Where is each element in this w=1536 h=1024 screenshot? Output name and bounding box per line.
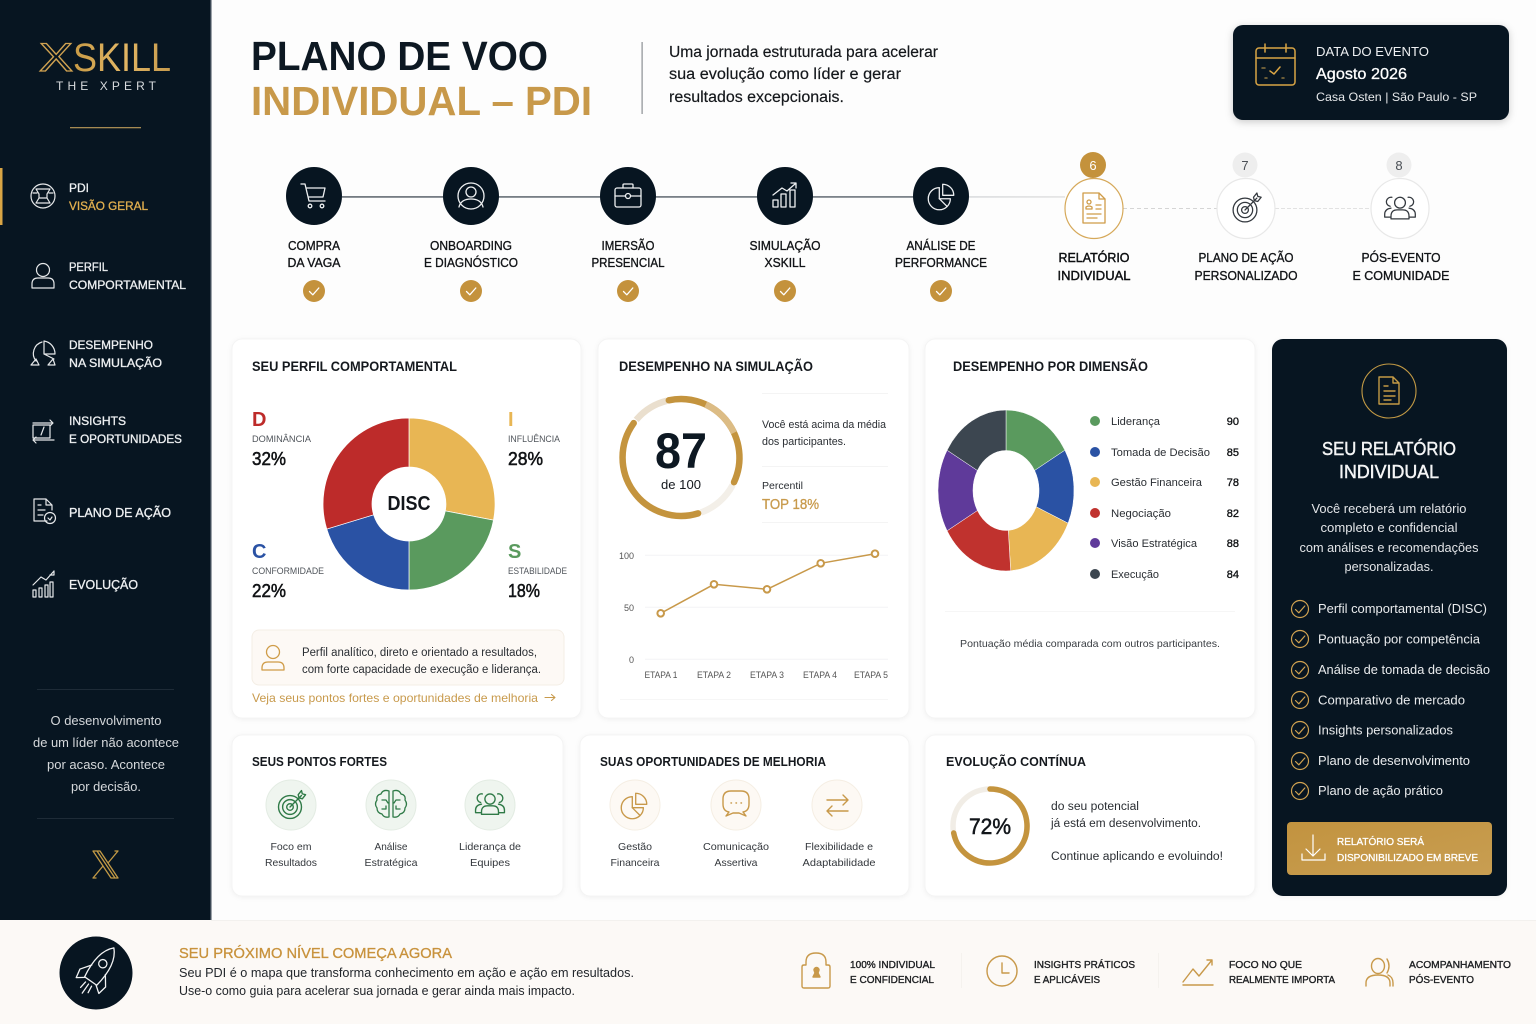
legend: Visão Estratégica bbox=[1111, 538, 1198, 550]
checklist: Pontuação por competência bbox=[1318, 632, 1480, 646]
line chart: ETAPA 2 bbox=[697, 670, 731, 680]
nav item: perfil comportamental bbox=[32, 260, 186, 292]
panel: seus pontos fortes bbox=[232, 735, 563, 896]
call to action text bbox=[179, 945, 634, 998]
heading: SEUS PONTOS FORTES bbox=[252, 754, 387, 769]
strength: análise estratégica bbox=[364, 780, 418, 869]
strength: foco em resultados: Resultados bbox=[265, 857, 317, 869]
subtitle: Uma jornada estruturada para acelerar bbox=[669, 44, 938, 61]
step 3: imersão presencial: PRESENCIAL bbox=[592, 256, 665, 270]
legend: D: DOMINÂNCIA bbox=[252, 434, 312, 445]
icon: calendar bbox=[1256, 44, 1295, 85]
logo: XSKILL: THE XPERT bbox=[56, 79, 157, 93]
benefit: acompanhamento pós-evento bbox=[1366, 958, 1511, 986]
logo: XSKILL: X bbox=[39, 36, 73, 80]
benefit: acompanhamento pós-evento: PÓS-EVENTO bbox=[1409, 973, 1474, 986]
legend: Negociação bbox=[1111, 508, 1171, 520]
line chart bbox=[619, 550, 888, 680]
legend: I bbox=[508, 409, 561, 469]
call to action text: Seu PDI é o mapa que transforma conhecimento em ação e ação em resultados. bbox=[179, 966, 634, 980]
heading: SEU RELATÓRIO bbox=[1322, 438, 1456, 459]
nav item: evolução bbox=[33, 571, 138, 597]
benefit: insights práticos: E APLICÁVEIS bbox=[1034, 973, 1100, 986]
step 1: compra da vaga: COMPRA bbox=[288, 239, 341, 253]
legend: 78 bbox=[1227, 477, 1239, 489]
footer banner bbox=[0, 920, 1536, 1024]
nav item: PDI visão geral: PDI bbox=[69, 181, 89, 195]
line chart: ETAPA 4 bbox=[803, 670, 837, 680]
icon: X mark bbox=[93, 851, 118, 878]
opportunity: comunicação assertiva: Comunicação bbox=[703, 841, 769, 853]
opportunity: flexibilidade e adaptabilidade: Adaptabilidade bbox=[802, 857, 876, 869]
description: personalizadas. bbox=[1344, 560, 1434, 574]
checklist: Comparativo de mercado bbox=[1318, 694, 1465, 708]
step 1: compra da vaga bbox=[286, 167, 342, 302]
opportunity: comunicação assertiva bbox=[703, 780, 769, 869]
nav item: perfil comportamental: PERFIL bbox=[69, 260, 108, 274]
step 7: plano de ação personalizado bbox=[1194, 152, 1298, 283]
legend: I: 28% bbox=[508, 449, 543, 469]
opportunity: gestão financeira: Gestão bbox=[618, 841, 652, 853]
opportunity: gestão financeira bbox=[610, 780, 660, 869]
heading: DESEMPENHO POR DIMENSÃO bbox=[953, 359, 1148, 374]
step 2: onboarding e diagnóstico: E DIAGNÓSTICO bbox=[424, 255, 518, 270]
legend: C: 22% bbox=[252, 581, 286, 601]
callout: profile summary: Perfil analítico, direto e orientado a resultados, bbox=[302, 647, 537, 659]
step 3: imersão presencial bbox=[592, 167, 665, 302]
checklist: Plano de ação prático bbox=[1318, 784, 1443, 798]
strength: liderança de equipes: Equipes bbox=[470, 857, 510, 869]
callout: profile summary bbox=[252, 630, 564, 685]
comparison note: Você está acima da média bbox=[762, 419, 886, 431]
legend bbox=[1090, 416, 1239, 581]
heading: DESEMPENHO NA SIMULAÇÃO bbox=[619, 359, 813, 374]
opportunity: flexibilidade e adaptabilidade: Flexibilidade e bbox=[805, 841, 873, 853]
checklist bbox=[1292, 600, 1490, 800]
step 8: pós-evento e comunidade: PÓS-EVENTO bbox=[1362, 250, 1441, 265]
button: RELATÓRIO SERÁ bbox=[1337, 835, 1424, 848]
legend: Liderança bbox=[1111, 416, 1161, 428]
call to action text: Use-o como guia para acelerar sua jornada e gerar ainda mais impacto. bbox=[179, 984, 575, 998]
description: completo e confidencial bbox=[1320, 521, 1458, 535]
evolution text: do seu potencial bbox=[1051, 801, 1139, 813]
step 6: relatório individual: INDIVIDUAL bbox=[1058, 268, 1130, 283]
step 8: pós-evento e comunidade: E COMUNIDADE bbox=[1352, 269, 1450, 283]
sidebar quote: por acaso. Acontece bbox=[47, 757, 165, 772]
nav item: desempenho na simulação: DESEMPENHO bbox=[69, 338, 153, 352]
line chart: ETAPA 1 bbox=[644, 670, 678, 680]
checklist: Análise de tomada de decisão bbox=[1318, 663, 1490, 677]
strength: foco em resultados: Foco em bbox=[270, 841, 312, 853]
benefit: insights práticos: INSIGHTS PRÁTICOS bbox=[1034, 958, 1135, 971]
step 5: análise de performance bbox=[895, 167, 987, 302]
legend: 88 bbox=[1227, 538, 1239, 550]
score gauge: 87 bbox=[655, 423, 707, 479]
heading: INDIVIDUAL bbox=[1339, 462, 1439, 482]
checklist: Perfil comportamental (DISC) bbox=[1318, 602, 1487, 616]
legend: 90 bbox=[1227, 416, 1239, 428]
legend: 85 bbox=[1227, 447, 1239, 459]
sidebar quote: por decisão. bbox=[71, 779, 141, 794]
nav item: desempenho na simulação bbox=[31, 338, 162, 370]
progress ring: 72% bbox=[969, 814, 1011, 839]
legend: D: 32% bbox=[252, 449, 286, 469]
nav item: perfil comportamental: COMPORTAMENTAL bbox=[69, 278, 186, 292]
step 2: onboarding e diagnóstico: ONBOARDING bbox=[430, 239, 512, 253]
score gauge bbox=[623, 399, 739, 516]
panel: seu perfil comportamental: DISC bbox=[388, 493, 430, 515]
line chart: ETAPA 3 bbox=[750, 670, 784, 680]
logo: XSKILL: SKILL bbox=[73, 36, 171, 80]
benefit: individual e confidencial bbox=[802, 953, 935, 988]
chart: DISC donut bbox=[323, 418, 495, 590]
nav item: insights e oportunidades bbox=[33, 414, 182, 446]
legend: C: C bbox=[252, 541, 266, 563]
line chart: 0 bbox=[629, 655, 634, 665]
legend: Tomada de Decisão bbox=[1111, 447, 1210, 459]
legend: S bbox=[508, 541, 567, 601]
percentile bbox=[762, 480, 819, 513]
evolution text: já está em desenvolvimento. bbox=[1050, 818, 1201, 830]
legend: D bbox=[252, 409, 312, 469]
step 8: pós-evento e comunidade: 8 bbox=[1395, 158, 1403, 173]
legend: Execução bbox=[1111, 569, 1159, 581]
panel: evolução contínua bbox=[925, 735, 1255, 896]
evolution text bbox=[1050, 801, 1223, 863]
percentile: TOP 18% bbox=[762, 497, 819, 513]
event date box: Casa Osten | São Paulo - SP bbox=[1316, 90, 1477, 104]
step 5: análise de performance: ANÁLISE DE bbox=[906, 238, 976, 253]
step 7: plano de ação personalizado: 7 bbox=[1241, 158, 1249, 173]
step 6: relatório individual: RELATÓRIO bbox=[1058, 250, 1130, 265]
legend: C bbox=[252, 541, 324, 601]
nav item: plano de ação: PLANO DE AÇÃO bbox=[69, 506, 171, 520]
benefit: foco no que importa bbox=[1183, 960, 1335, 986]
legend: S: S bbox=[508, 541, 521, 563]
nav item: plano de ação bbox=[34, 499, 171, 524]
step 4: simulação xskill: XSKILL bbox=[764, 256, 806, 270]
nav item: desempenho na simulação: NA SIMULAÇÃO bbox=[69, 356, 162, 370]
opportunity: gestão financeira: Financeira bbox=[610, 857, 660, 869]
benefit: individual e confidencial: E CONFIDENCIAL bbox=[850, 975, 934, 986]
nav item: PDI visão geral bbox=[31, 181, 148, 213]
call to action text: SEU PRÓXIMO NÍVEL COMEÇA AGORA bbox=[179, 945, 452, 962]
sidebar bbox=[0, 0, 212, 920]
strength: análise estratégica: Estratégica bbox=[364, 857, 418, 869]
icon: report bbox=[1362, 364, 1416, 418]
footnote: Pontuação média comparada com outros participantes. bbox=[960, 639, 1220, 650]
benefit: acompanhamento pós-evento: ACOMPANHAMENTO bbox=[1409, 960, 1511, 971]
legend: I: INFLUÊNCIA bbox=[508, 434, 561, 445]
benefit: individual e confidencial: 100% INDIVIDUAL bbox=[850, 960, 935, 971]
legend: C: CONFORMIDADE bbox=[252, 566, 324, 577]
nav item: insights e oportunidades: INSIGHTS bbox=[69, 414, 126, 428]
benefit: insights práticos bbox=[987, 956, 1135, 986]
panel: seu relatório individual bbox=[1272, 339, 1507, 896]
legend: I: I bbox=[508, 409, 514, 431]
description: Você receberá um relatório bbox=[1312, 502, 1467, 516]
checklist: Plano de desenvolvimento bbox=[1318, 754, 1470, 768]
button bbox=[1287, 822, 1492, 875]
panel: desempenho na simulação bbox=[598, 339, 909, 718]
nav item: insights e oportunidades: E OPORTUNIDADES bbox=[69, 432, 182, 446]
step 4: simulação xskill bbox=[750, 167, 821, 302]
panel: seu perfil comportamental bbox=[232, 339, 581, 718]
opportunity: comunicação assertiva: Assertiva bbox=[714, 857, 758, 869]
nav item: evolução: EVOLUÇÃO bbox=[69, 578, 138, 592]
legend: S: 18% bbox=[508, 581, 540, 601]
step 6: relatório individual bbox=[1058, 152, 1130, 283]
subtitle bbox=[669, 44, 938, 106]
title: PLANO DE VOO bbox=[251, 33, 548, 79]
benefit: foco no que importa: FOCO NO QUE bbox=[1229, 960, 1302, 971]
heading: SUAS OPORTUNIDADES DE MELHORIA bbox=[600, 754, 827, 769]
description: com análises e recomendações bbox=[1300, 541, 1478, 555]
strength: liderança de equipes bbox=[459, 780, 521, 869]
step 3: imersão presencial: IMERSÃO bbox=[602, 239, 655, 253]
legend: S: ESTABILIDADE bbox=[508, 566, 567, 577]
logo: XSKILL bbox=[39, 36, 171, 93]
step 7: plano de ação personalizado: PERSONALIZADO bbox=[1194, 269, 1298, 283]
nav item: PDI visão geral: VISÃO GERAL bbox=[69, 199, 148, 213]
line chart: 50 bbox=[624, 603, 634, 613]
link with arrow: Veja seus pontos fortes e oportunidades de melhoria bbox=[252, 691, 538, 705]
step 1: compra da vaga: DA VAGA bbox=[288, 256, 341, 270]
callout: profile summary: com forte capacidade de execução e liderança. bbox=[302, 664, 541, 676]
step 8: pós-evento e comunidade bbox=[1352, 152, 1450, 283]
progress ring bbox=[953, 789, 1027, 863]
legend: Gestão Financeira bbox=[1111, 477, 1203, 489]
strength: foco em resultados bbox=[265, 780, 317, 869]
legend: D: D bbox=[252, 409, 266, 431]
step 6: relatório individual: 6 bbox=[1089, 158, 1097, 173]
event date box: Agosto 2026 bbox=[1316, 66, 1407, 83]
step 5: análise de performance: PERFORMANCE bbox=[895, 256, 987, 270]
comparison note bbox=[762, 419, 886, 448]
evolution text: Continue aplicando e evoluindo! bbox=[1051, 851, 1223, 863]
journey timeline bbox=[286, 152, 1450, 302]
subtitle: sua evolução como líder e gerar bbox=[669, 66, 901, 83]
comparison note: dos participantes. bbox=[762, 436, 846, 448]
title bbox=[251, 33, 592, 124]
step 4: simulação xskill: SIMULAÇÃO bbox=[750, 239, 821, 253]
legend: 82 bbox=[1227, 508, 1239, 520]
sidebar quote bbox=[33, 713, 179, 794]
checklist: Insights personalizados bbox=[1318, 724, 1453, 738]
panel: desempenho por dimensão bbox=[925, 339, 1255, 718]
step 2: onboarding e diagnóstico bbox=[424, 167, 518, 302]
active nav marker bbox=[0, 168, 2, 225]
heading: EVOLUÇÃO CONTÍNUA bbox=[946, 754, 1087, 769]
event date box bbox=[1233, 25, 1509, 120]
title: INDIVIDUAL – PDI bbox=[251, 78, 592, 124]
step 7: plano de ação personalizado: PLANO DE AÇÃO bbox=[1198, 251, 1294, 265]
percentile: Percentil bbox=[762, 480, 803, 492]
button: DISPONIBILIZADO EM BREVE bbox=[1337, 853, 1478, 864]
legend: 84 bbox=[1227, 569, 1239, 581]
panel: suas oportunidades de melhoria bbox=[580, 735, 909, 896]
event date box: DATA DO EVENTO bbox=[1316, 45, 1429, 59]
icon: rocket bbox=[60, 936, 132, 1010]
sidebar quote: O desenvolvimento bbox=[50, 713, 162, 728]
heading bbox=[1322, 438, 1456, 482]
strength: análise estratégica: Análise bbox=[374, 841, 408, 853]
sidebar quote: de um líder não acontece bbox=[33, 735, 179, 750]
heading: SEU PERFIL COMPORTAMENTAL bbox=[252, 359, 457, 374]
description bbox=[1300, 502, 1478, 574]
strength: liderança de equipes: Liderança de bbox=[459, 841, 521, 853]
score gauge: de 100 bbox=[661, 477, 701, 492]
chart: dimension donut bbox=[938, 410, 1074, 571]
line chart: 100 bbox=[619, 551, 634, 561]
subtitle: resultados excepcionais. bbox=[669, 89, 844, 106]
benefit: foco no que importa: REALMENTE IMPORTA bbox=[1229, 975, 1335, 986]
opportunity: flexibilidade e adaptabilidade bbox=[802, 780, 876, 869]
line chart: ETAPA 5 bbox=[854, 670, 888, 680]
